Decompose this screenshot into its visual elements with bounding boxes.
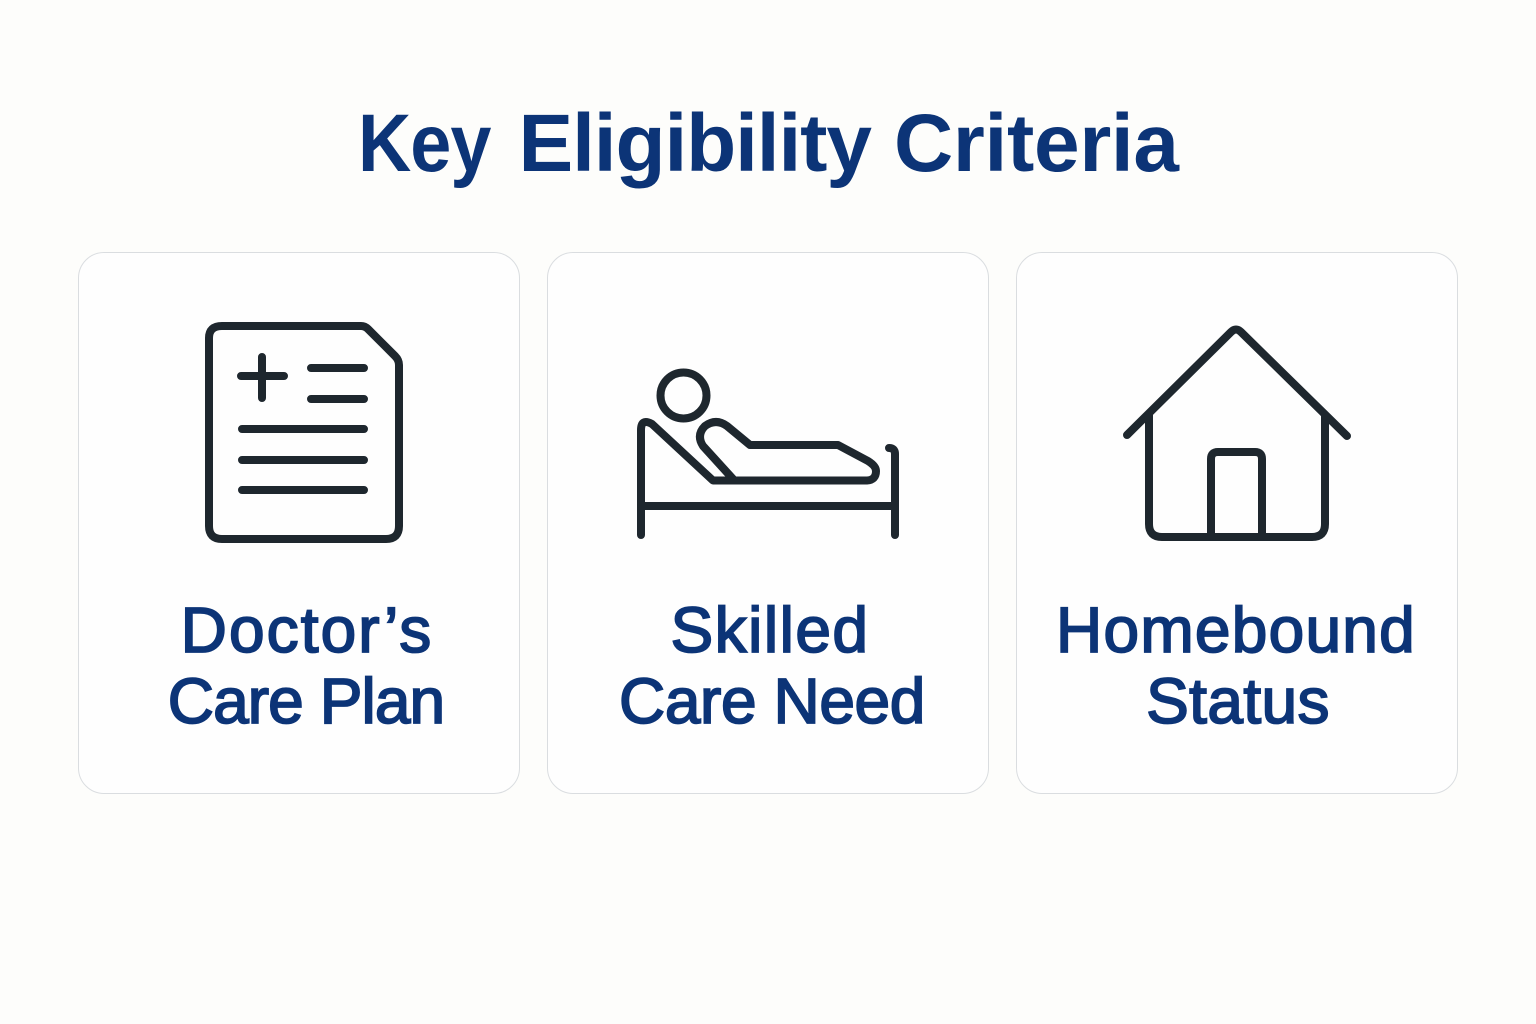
title: Criteria bbox=[894, 98, 1179, 189]
label: homebound status bbox=[1056, 594, 1416, 737]
label: doctor's care plan: Doctor’s bbox=[181, 594, 433, 666]
icon: house bbox=[1127, 330, 1347, 537]
label: homebound status: Status bbox=[1146, 665, 1330, 737]
label: skilled care need: Care Need bbox=[619, 665, 925, 737]
title: Eligibility bbox=[518, 98, 871, 189]
panel: skilled care need bbox=[547, 252, 989, 794]
title bbox=[358, 98, 1180, 189]
label: homebound status: Homebound bbox=[1056, 594, 1416, 666]
label: skilled care need: Skilled bbox=[670, 594, 870, 666]
panel: homebound status bbox=[1016, 252, 1458, 794]
label: skilled care need bbox=[619, 594, 925, 737]
icon: patient in bed bbox=[641, 372, 895, 535]
title: Key bbox=[358, 98, 490, 189]
label: doctor's care plan bbox=[168, 594, 444, 737]
label: doctor's care plan: Care Plan bbox=[168, 665, 444, 737]
icon: medical document bbox=[209, 326, 399, 539]
panel: doctor's care plan bbox=[78, 252, 520, 794]
